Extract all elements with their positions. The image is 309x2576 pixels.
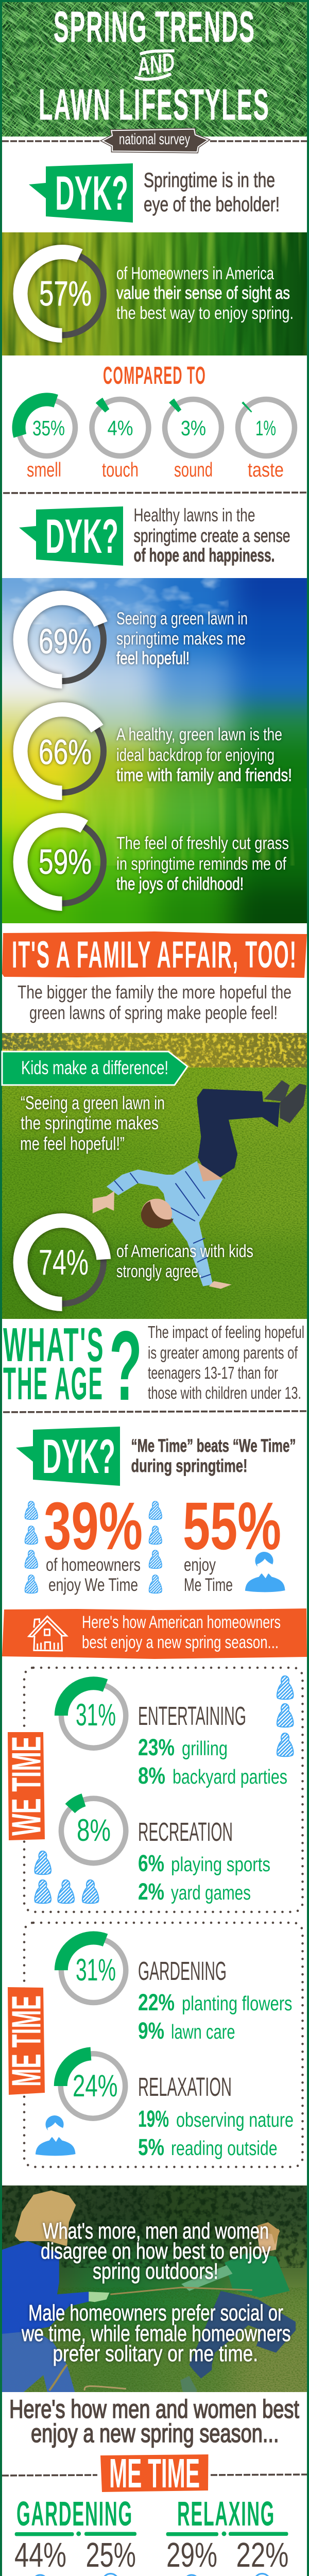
background: grass: [2, 2, 307, 137]
ring: touch 4%: touch: [102, 459, 139, 481]
label: enjoy We Time: [48, 1575, 138, 1595]
text: childhood: the joys of childhood!: [116, 874, 244, 894]
label: of homeowners: [46, 1555, 141, 1575]
quote: me feel hopeful!”: [20, 1133, 125, 1154]
and lockup: [134, 47, 177, 81]
text: hopeful: [116, 609, 248, 668]
tag: we time: [3, 1732, 49, 1840]
text: relaxation: 5%: [138, 2134, 164, 2160]
text: gardening: 22%: [138, 1989, 175, 2015]
speech bubble: DYK?: [42, 1429, 115, 1483]
callout text: during springtime!: [131, 1456, 247, 1476]
label: [46, 1555, 141, 1595]
text: male and female preferences: [21, 2300, 290, 2366]
text: recreation: playing sports: [171, 1854, 270, 1876]
ring: gardening 31%: [61, 1938, 126, 2003]
ring: touch 4%: 4%: [107, 416, 133, 440]
icons: entertaining people: [277, 1676, 293, 1756]
column: gardening: [14, 2495, 138, 2576]
column: relaxing: 22%: [236, 2536, 288, 2574]
figure: male: [90, 2574, 138, 2576]
ring chart: 69%: [21, 598, 104, 681]
tag: me time: ME TIME: [109, 2450, 200, 2496]
text: gardening: 9%: [138, 2018, 164, 2044]
ring: smell 35%: 35%: [32, 416, 65, 440]
ring: relaxation 24%: [61, 2054, 125, 2119]
ring chart: 74%: [21, 1221, 104, 1304]
background: dew grass: [2, 232, 307, 355]
ring: taste 1%: [227, 388, 306, 481]
ring chart: 69%: 69%: [39, 622, 92, 661]
background: sky to grass gradient: [2, 578, 307, 923]
text: relaxation: 19%: [138, 2106, 169, 2132]
text: recreation: yard games: [171, 1882, 251, 1904]
banner: kids make a difference: Kids make a difference!: [21, 1057, 168, 1078]
icon: woman: [245, 1552, 285, 1592]
photo: boy doing a handstand: [93, 1080, 306, 1289]
stat: 55% me time: [149, 1488, 285, 1595]
text: recreation: 6%: [138, 1850, 164, 1876]
badge: national survey: national survey: [119, 131, 190, 148]
text: sense of sight: [116, 264, 294, 323]
tag: me time: [100, 2450, 208, 2496]
text: strongly agree: of Americans with kids: [116, 1242, 253, 1261]
label: Me Time: [184, 1575, 233, 1595]
column: relaxing: [166, 2495, 289, 2576]
photo: forest and lawn: [2, 2185, 307, 2392]
callout: DYK 2: [19, 504, 290, 566]
text: entertaining: 23%: [138, 1734, 175, 1760]
text: relaxation: RELAXATION: [138, 2072, 232, 2102]
ring chart: 66%: [21, 709, 104, 793]
ring: entertaining 31%: 31%: [76, 1698, 116, 1732]
text: hopeful: feel hopeful!: [116, 649, 190, 668]
heading: WHAT'S: [3, 1318, 105, 1371]
paragraph: [148, 1323, 304, 1402]
callout text: Healthy lawns in the: [134, 504, 255, 526]
title: [39, 3, 270, 129]
text: entertaining: [138, 1701, 287, 1789]
panel: header: [2, 2, 307, 137]
callout text: [144, 169, 280, 216]
ring chart: 59%: 59%: [39, 842, 92, 882]
ring: touch 4%: [80, 388, 160, 481]
ring chart: 74%: 74%: [39, 1242, 89, 1282]
label: [184, 1555, 233, 1595]
text: childhood: [116, 834, 289, 894]
stat: 39% we time: [25, 1488, 143, 1595]
text: men and women disagree: spring outdoors!: [93, 2259, 218, 2284]
icons: people column: [149, 1501, 162, 1593]
number: 39%: [44, 1488, 143, 1564]
speech bubble: [29, 163, 133, 223]
icon: woman: [36, 2115, 76, 2156]
ring chart: 57%: [21, 252, 104, 335]
heading: [3, 1310, 142, 1421]
panel: kids photo: [1, 1033, 307, 1319]
ring: smell 35%: [12, 393, 82, 481]
ring: sound 3%: [153, 388, 233, 481]
panel: family affair: [2, 931, 307, 1023]
quote: [20, 1092, 165, 1154]
white divider dashes: [2, 140, 307, 142]
photo: people pulling a rope: [2, 2191, 296, 2401]
text: hopeful: Seeing a green lawn in: [116, 609, 248, 629]
tag: me time: ME TIME: [3, 1995, 49, 2087]
ring: relaxation 24%: 24%: [73, 2069, 117, 2103]
speech bubble: [19, 506, 123, 566]
ring: smell 35%: smell: [27, 459, 61, 481]
ring: recreation 8%: 8%: [77, 1813, 111, 1848]
speech bubble: DYK?: [45, 509, 118, 563]
figure: female: [18, 2575, 67, 2576]
text: male and female preferences: prefer solitary or me time.: [53, 2341, 258, 2366]
panel: what's the age: [3, 1310, 304, 1421]
photo: lawn and hedge: [2, 1033, 307, 1319]
ring: taste 1%: 1%: [255, 416, 276, 440]
tag: we time: WE TIME: [3, 1736, 49, 1836]
banner: kids make a difference: [2, 1052, 187, 1085]
text: gardening: [138, 1956, 293, 2044]
heading: COMPARED TO: [103, 362, 206, 389]
badge: national survey: [102, 129, 208, 152]
text: entertaining: 8%: [138, 1762, 165, 1789]
heading: THE AGE: [3, 1358, 104, 1409]
text: hopeful: springtime makes me: [116, 629, 246, 649]
ring: entertaining 31%: [61, 1683, 126, 1748]
panel: me time: [3, 1923, 303, 2167]
text: entertaining: grilling: [182, 1738, 228, 1760]
panel: dew grass 57%: [2, 232, 307, 355]
panel: compared to: [12, 362, 306, 481]
text: gardening: GARDENING: [138, 1956, 227, 1986]
and lockup: AND: [134, 47, 177, 81]
heading: men and women: [9, 2395, 299, 2448]
panel: gender me time: [2, 2450, 307, 2576]
text: strongly agree: [116, 1242, 253, 1281]
text: relaxation: [138, 2072, 294, 2160]
banner text: [82, 1613, 281, 1652]
ring: recreation 8%: [48, 1785, 139, 1876]
icons: people column: [25, 1501, 38, 1593]
callout: DYK 3: [16, 1427, 296, 1486]
ring chart: 57%: 57%: [39, 274, 92, 313]
figure: male: [242, 2574, 289, 2576]
text: recreation: 2%: [138, 1878, 164, 1905]
panel: tug of war photo: [2, 2185, 307, 2392]
ring: sound 3%: sound: [174, 459, 213, 481]
icons: recreation people: [35, 1851, 98, 1903]
heading: ?: [109, 1310, 142, 1421]
text: family and friends: [116, 725, 292, 785]
panel: sky and grass statistics: [2, 578, 307, 923]
ring: taste 1%: taste: [248, 459, 284, 481]
figure: female: [169, 2575, 218, 2576]
label: enjoy: [184, 1555, 216, 1575]
ring: gardening 31%: 31%: [76, 1953, 116, 1987]
quote: “Seeing a green lawn in: [21, 1092, 165, 1113]
subtitle: [18, 981, 291, 1023]
quote: the springtime makes: [21, 1112, 159, 1133]
tag: me time: [3, 1987, 49, 2095]
column: gardening: GARDENING: [16, 2495, 133, 2533]
column: relaxing: 29%: [166, 2536, 217, 2574]
callout: DYK 1: [29, 163, 280, 223]
column: gardening: 44%: [14, 2536, 66, 2574]
text: strongly agree: strongly agree.: [116, 1262, 202, 1281]
callout text: [131, 1436, 296, 1476]
panel: we time: [3, 1668, 303, 1912]
icon: house: [29, 1616, 66, 1651]
speech bubble: DYK?: [55, 166, 128, 220]
text: men and women disagree: [41, 2218, 271, 2284]
text: recreation: [138, 1817, 270, 1905]
text: recreation: RECREATION: [138, 1817, 233, 1846]
banner: homeowners: [2, 1608, 307, 1659]
column: gardening: 25%: [85, 2536, 136, 2574]
speech bubble: [16, 1427, 120, 1486]
ring chart: 59%: [21, 820, 104, 904]
callout text: [134, 504, 290, 566]
text: relaxation: reading outside: [171, 2138, 277, 2160]
ring: sound 3%: 3%: [181, 416, 206, 440]
ring chart: 66%: 66%: [39, 733, 92, 772]
text: gardening: lawn care: [171, 2021, 235, 2043]
